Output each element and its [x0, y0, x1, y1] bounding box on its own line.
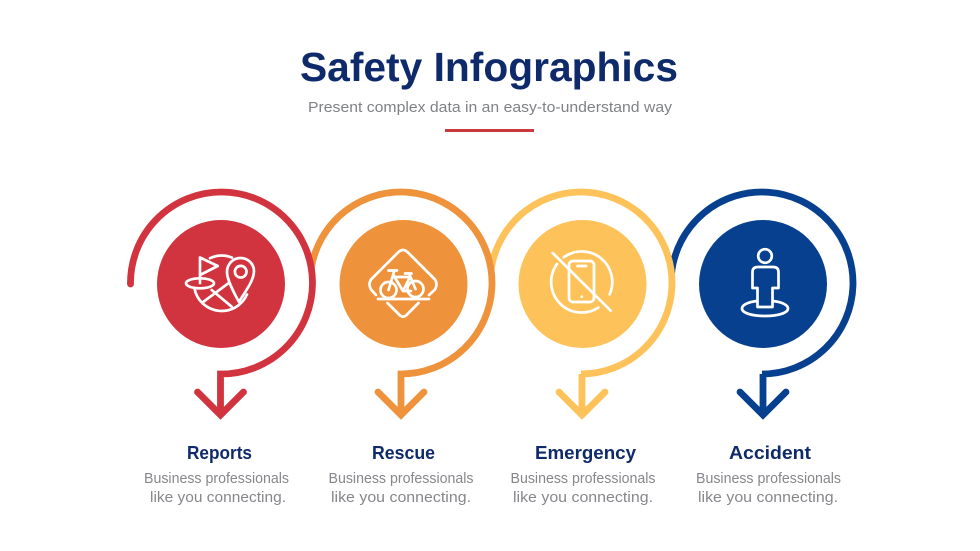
ring arrow: blue [672, 192, 853, 415]
disk: yellow [518, 220, 646, 348]
disk: blue [699, 220, 827, 348]
title: Safety Infographics [300, 44, 678, 90]
description: Reports [144, 470, 289, 506]
step: Reports [130, 192, 312, 506]
description: Emergency: like you connecting. [513, 489, 653, 506]
title underline [445, 129, 534, 132]
description: Accident: Business professionals [696, 470, 841, 487]
description: Emergency: Business professionals [510, 470, 656, 487]
icon: no phone [551, 251, 612, 313]
step: Emergency [491, 192, 672, 506]
heading: Emergency: Emergency [535, 443, 636, 463]
description: Rescue: Business professionals [328, 470, 474, 487]
step: Accident [672, 192, 853, 506]
description: Accident: like you connecting. [698, 489, 838, 506]
description: Emergency [510, 470, 656, 506]
icon: bicycle sign [370, 250, 436, 317]
icon: person on spot [742, 249, 788, 316]
ring arrow: yellow [491, 192, 672, 415]
step: Rescue [311, 192, 492, 506]
heading: Accident: Accident [729, 443, 811, 463]
disk: orange [340, 220, 468, 348]
heading: Rescue: Rescue [372, 443, 435, 463]
description: Accident [696, 470, 841, 506]
description: Rescue: like you connecting. [331, 489, 471, 506]
description: Reports: Business professionals [144, 470, 289, 487]
description: Rescue [328, 470, 474, 506]
ring arrow: red [130, 192, 312, 415]
heading: Reports: Reports [187, 443, 252, 463]
ring arrow: orange [311, 192, 492, 415]
disk: red [157, 220, 285, 348]
description: Reports: like you connecting. [150, 489, 286, 506]
subtitle: Present complex data in an easy-to-understand way [308, 99, 673, 116]
icon: map with flag and pin [186, 256, 254, 311]
